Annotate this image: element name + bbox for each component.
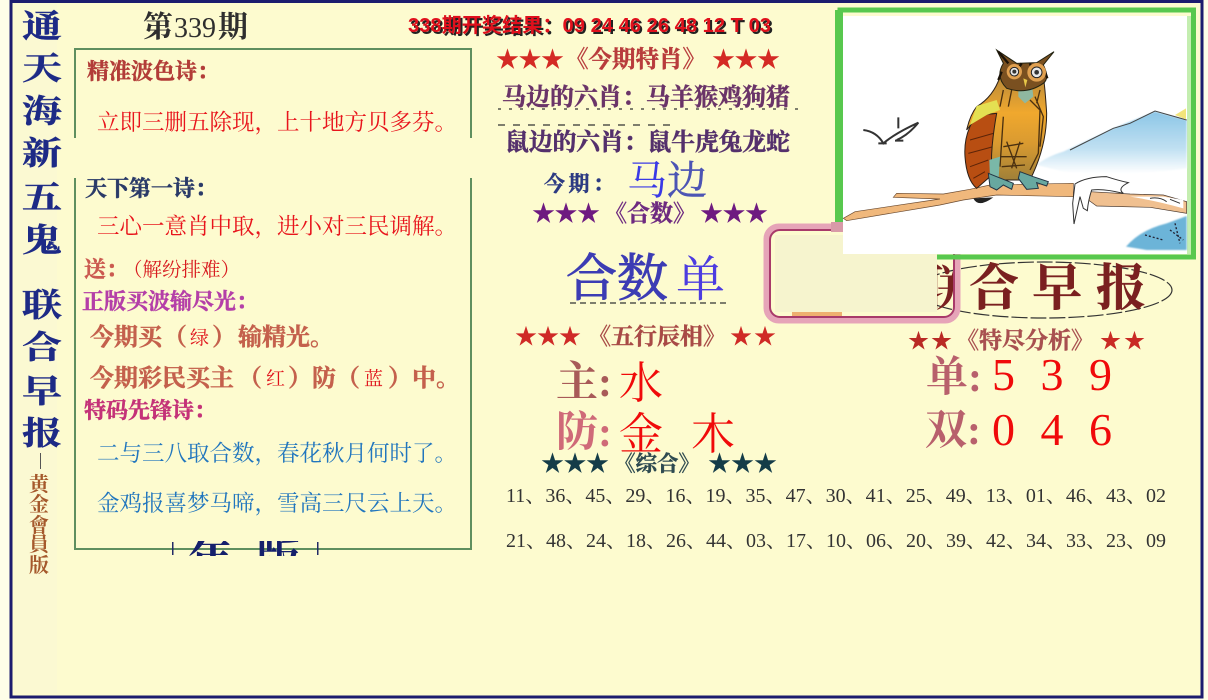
newspaper title ellipse: 报: [1096, 260, 1146, 316]
side title column: 合: [22, 329, 62, 365]
this issue label: 今期：: [544, 172, 614, 196]
cut off footer text: 年: [188, 535, 232, 584]
panel: poems frame: [75, 49, 471, 549]
odd tails: [926, 349, 1112, 401]
side title column: 海: [22, 93, 62, 129]
line: buy green: 输精光。: [238, 324, 334, 351]
side title column: 新: [22, 135, 62, 171]
cut off footer text: [172, 541, 318, 556]
side edition label: 員: [29, 533, 49, 556]
side edition label: 金: [29, 493, 49, 516]
line: main and guard colour: （: [238, 366, 262, 392]
line: main and guard colour: 红: [266, 368, 285, 390]
guard elements: [556, 410, 735, 459]
line: main and guard colour: 中。: [412, 365, 460, 392]
heading: five elements: ★★★: [515, 324, 581, 349]
heading: sum: [532, 200, 768, 226]
guard elements: 木: [691, 410, 735, 459]
heading: tail analysis: 《特尽分析》: [956, 328, 1094, 353]
issue number: [143, 11, 248, 44]
this issue value: [627, 158, 707, 203]
main element: 水: [619, 359, 663, 408]
line: buy green: ）: [212, 325, 236, 351]
heading: special zodiac: ★★★: [712, 46, 780, 72]
poem: blue one: 二与三八取合数，春花秋月何时了。: [97, 441, 457, 467]
heading: overall: [541, 450, 777, 476]
owl wing: [965, 113, 1000, 188]
dotted separators: [498, 109, 806, 125]
heading: five elements: ★★: [730, 324, 776, 349]
heading: overall: ★★★: [708, 450, 777, 476]
line: buy green: [90, 324, 334, 351]
newspaper title ellipse: 早: [1032, 260, 1082, 316]
branch: [843, 183, 1073, 221]
newspaper title ellipse: [916, 260, 1172, 318]
image: owl picture: [831, 10, 1194, 257]
side title column: [22, 8, 62, 451]
side title column: 天: [22, 50, 62, 86]
heading: five elements: 《五行辰相》: [588, 324, 726, 349]
main element: 主:: [556, 360, 612, 406]
owl body: [967, 77, 1047, 180]
guard elements: 金: [619, 410, 663, 459]
side edition label: [29, 453, 52, 577]
cut off footer text: 版: [256, 535, 300, 584]
claws: [988, 172, 1048, 190]
poem: red two: 三心一意肖中取，进小对三民调解。: [97, 214, 457, 240]
even tails: [925, 404, 1112, 455]
heading: sum: ★★★: [700, 200, 768, 226]
line: main and guard colour: ）: [288, 366, 312, 392]
previous results banner: 338期开奖结果：09 24 46 26 48 12 T 03: [410, 16, 773, 39]
sum value: 合数: [566, 252, 668, 308]
side edition label: 版: [29, 554, 49, 577]
line: main and guard colour: [90, 365, 460, 392]
shore: [1126, 216, 1187, 250]
heading: overall: 《综合》: [614, 452, 700, 476]
side edition label: 黄: [29, 473, 52, 496]
heading: special zodiac: 《今期特肖》: [565, 46, 706, 73]
heading: special zodiac: [496, 46, 780, 73]
rat: [1073, 177, 1128, 224]
heading: first poem: 天下第一诗：: [85, 176, 217, 201]
gift line: （解纷排难）: [123, 259, 240, 281]
gift line: [84, 257, 240, 282]
line: buy green: 绿: [190, 327, 209, 349]
zodiac line: horse side: 马边的六肖：马羊猴鸡狗猪: [502, 84, 790, 111]
sum value: [566, 252, 728, 308]
heading: sum: 《合数》: [604, 201, 696, 226]
line: main and guard colour: （: [336, 366, 360, 392]
line: main and guard colour: 防: [312, 365, 336, 392]
owl head: [997, 50, 1054, 91]
side title column: 通: [22, 8, 62, 44]
heading: tail analysis: ★★: [908, 330, 952, 353]
previous results banner: 338期开奖结果：09 24 46 26 48 12 T 03: [408, 14, 771, 37]
side edition label: 會: [29, 514, 49, 537]
heading: tail analysis: ★★: [1100, 330, 1145, 353]
guard elements: 防:: [556, 410, 612, 456]
even tails: 0 4 6: [992, 404, 1112, 455]
zodiac line: rat side: 鼠边的六肖：鼠牛虎兔龙蛇: [505, 129, 790, 156]
heading: sum: ★★★: [532, 200, 600, 226]
main element: [556, 359, 663, 408]
newspaper title ellipse: 联: [918, 263, 966, 316]
sum value: 单: [676, 252, 725, 307]
even tails: 双:: [925, 408, 981, 454]
heading: overall: ★★★: [541, 450, 609, 476]
heading: special code poem: 特码先锋诗：: [84, 398, 216, 423]
poem: blue two: 金鸡报喜梦马啼，雪高三尺云上天。: [97, 491, 457, 517]
line: main and guard colour: 今期彩民买主: [90, 365, 234, 392]
gift line: 送：: [84, 257, 128, 282]
poem: red one: 立即三删五除现，上十地方贝多芬。: [97, 110, 457, 136]
newspaper title ellipse: 合: [969, 260, 1019, 316]
pink frame: [767, 227, 957, 320]
line: buy green: 今期买: [90, 324, 164, 351]
side title column: 联: [22, 287, 62, 323]
issue number: 期: [218, 11, 248, 44]
side title column: 报: [22, 415, 62, 451]
issue number: 第: [143, 11, 173, 44]
heading: five elements: [515, 324, 776, 349]
line: main and guard colour: ）: [388, 366, 412, 392]
side title column: 鬼: [22, 222, 62, 258]
issue number: 339: [174, 13, 216, 44]
heading: tail analysis: [908, 328, 1145, 353]
bird: [863, 117, 918, 143]
heading: special zodiac: ★★★: [496, 46, 564, 72]
odd tails: 单:: [926, 354, 982, 401]
side title column: 早: [22, 373, 62, 409]
line: buy green: （: [163, 325, 187, 351]
odd tails: 5 3 9: [992, 349, 1112, 400]
heading: wave colour poem: 精准波色诗：: [87, 59, 219, 84]
heading: genuine edition: 正版买波输尽光：: [82, 289, 258, 314]
side title column: 五: [22, 179, 62, 215]
mountain: [1037, 112, 1187, 174]
number row one: 11、36、45、29、16、19、35、47、30、41、25、49、13、01、46、43、02: [506, 485, 1166, 507]
line: main and guard colour: 蓝: [364, 368, 383, 390]
this issue value: 马: [627, 158, 667, 203]
this issue value: 边: [667, 158, 707, 203]
number row two: 21、48、24、18、26、44、03、17、10、06、20、39、42、34、33、23、09: [506, 530, 1166, 552]
